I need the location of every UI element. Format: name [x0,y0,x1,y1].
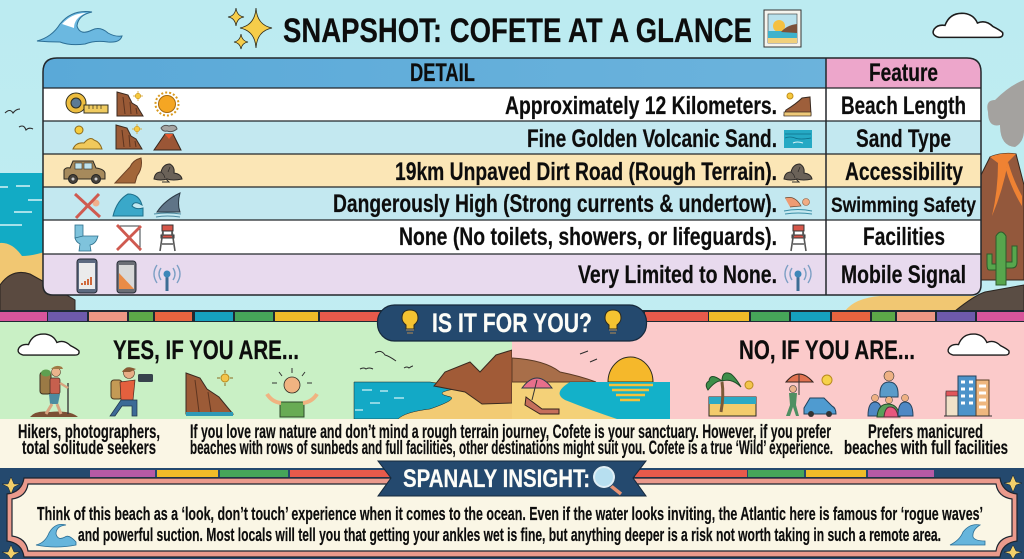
icon: volcano [154,125,181,150]
heading: yes: YES, IF YOU ARE... [113,335,299,365]
decorative birds [5,109,33,130]
icon: magnifying glass [592,466,621,494]
heading: no: NO, IF YOU ARE... [739,335,915,365]
icon: headland [784,93,811,116]
text: yes audience: Hikers, photographers, [18,422,160,443]
row: accessibility [64,158,963,186]
row: beach length [66,91,966,120]
label: accessibility: Accessibility [845,158,963,186]
column heading: detail: DETAIL [410,59,475,87]
icon: crowd [868,371,913,417]
icon: no shower [117,225,141,251]
icon: light bulb [402,310,418,333]
text: yes audience [18,422,160,459]
icon: phone with weak bars [77,259,97,293]
icon: wave [113,194,143,216]
icon: star top left [2,477,20,494]
icon: water [784,130,812,148]
panel: yes, if you are [0,321,512,419]
icon: antenna [785,265,811,291]
text: sand: Fine Golden Volcanic Sand. [527,125,777,153]
icon: sand pile [73,126,102,149]
banner: is it for you [378,305,646,341]
row: mobile signal [77,259,966,293]
panel: spanaly insight [0,461,1024,559]
banner heading: IS IT FOR YOU? [432,308,592,338]
icon: swimmer [784,197,812,214]
icon: rocks [784,164,812,182]
cloud [948,334,1009,355]
label: sand type: Sand Type [856,125,951,153]
icon: lifeguard chair [791,225,806,251]
icon: hiker [30,366,78,417]
text: yes audience: total solitude seekers [22,438,156,459]
table frame and row fills [43,58,981,295]
title: SNAPSHOT: COFETE AT A GLANCE [283,12,752,50]
icon: hotel buildings [944,376,992,416]
icon: toilet [75,225,98,251]
decorative wave, top left [37,12,122,45]
insight heading: SPANALY INSIGHT: [403,465,590,493]
icon: photographer [110,368,153,416]
table: snapshot details [43,58,981,295]
icon: star bottom left [2,545,20,559]
decorative cloud, top right [933,13,1003,37]
text: verdict [190,422,833,459]
icon: palm beach [706,373,756,416]
text: no audience [844,422,1008,459]
ribbon banner [378,461,646,496]
icon: dirt road [115,158,142,183]
icon: sun [156,92,178,116]
panel: summary strip [0,419,1024,469]
text: length: Approximately 12 Kilometers. [505,92,777,120]
icon: 4x4 jeep [64,161,105,184]
insight text [37,503,983,545]
colour stripe: insight band [90,470,934,477]
text: safety: Dangerously High (Strong currents & undertow). [333,190,777,218]
icon: no swimming [75,194,100,218]
panel: no, if you are [512,321,1024,419]
icon: shark fin [154,193,181,217]
icon: person arms raised [267,368,317,417]
icon: framed beach picture [764,10,801,47]
icon: cliff [116,124,142,149]
label: swimming safety: Swimming Safety [831,194,976,217]
icon: rocks [154,164,182,182]
label: mobile signal: Mobile Signal [841,261,966,289]
icon: sparkles [228,8,272,49]
row: sand type [73,124,951,153]
insight frame [7,478,1017,557]
icon: wave left [36,524,76,547]
icon: light bulb [605,310,621,333]
icon: phone no signal [117,261,136,293]
icon: antenna [154,265,180,291]
icon: wave right [950,525,985,545]
cactus [987,232,1017,285]
icon: star top right [1004,475,1022,492]
label: beach length: Beach Length [841,92,966,120]
icon: tape measure [66,93,108,113]
icon: cliff [117,91,143,116]
volcano [981,80,1024,280]
icon: umbrella person and car [786,374,836,417]
row: facilities [75,223,945,251]
text: access: 19km Unpaved Dirt Road (Rough Terrain). [395,158,777,186]
column heading: feature: Feature [869,59,938,87]
icon: star bottom right [1004,545,1022,559]
insight box [12,484,1012,551]
icon: cliff [186,370,233,416]
cloud [18,334,79,355]
label: facilities: Facilities [863,223,945,251]
illustration: coast with cliffs [354,350,512,419]
row: swimming safety [75,190,976,218]
colour stripe: middle band [0,310,1024,322]
text: facilities: None (No toilets, showers, or lifeguards). [399,223,777,251]
icon: lifeguard chair [160,225,175,251]
illustration: beach sunset [512,351,670,419]
text: signal: Very Limited to None. [578,261,777,289]
